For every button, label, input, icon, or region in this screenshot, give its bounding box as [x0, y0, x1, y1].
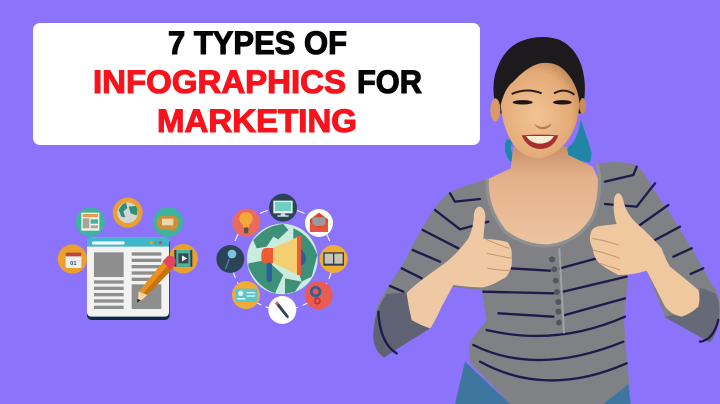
icon: monitor: [269, 194, 297, 222]
icon: envelope: [305, 209, 333, 237]
teal hair: [505, 120, 592, 163]
window: [87, 237, 170, 320]
icon: book: [320, 245, 348, 273]
icon: pencil: [137, 256, 176, 303]
button placket: [549, 248, 564, 333]
icon: light bulb: [232, 209, 260, 237]
left arm and hand: [407, 207, 512, 328]
title line 3: MARKETING: [157, 103, 357, 139]
jeans: [455, 362, 631, 404]
cuff: left sleeve: [373, 293, 430, 357]
title line 1: 7 TYPES OF: [168, 25, 347, 61]
smile: [522, 135, 558, 149]
eyebrows: [512, 90, 574, 95]
person giving thumbs up: [373, 37, 719, 404]
hair back: [493, 37, 585, 113]
icon: newspaper: [76, 207, 105, 237]
eyes: [513, 100, 572, 104]
shirt stripes: [378, 167, 718, 380]
icon: gears: [305, 281, 333, 309]
title line 2 end: FOR: [357, 64, 422, 100]
title panel: [33, 23, 480, 145]
neckband: [487, 163, 600, 246]
icon: calendar: [58, 244, 87, 274]
neck and chest: [487, 147, 602, 248]
right arm and hand: [590, 193, 699, 317]
face: [490, 63, 586, 158]
icon: globe: [113, 198, 143, 228]
megaphone: [261, 236, 306, 282]
cuff: right sleeve: [665, 287, 719, 343]
nose: [534, 123, 552, 129]
icon: magnifier: [216, 245, 244, 273]
icon: chat bubble: [153, 207, 183, 237]
icon: pen: [268, 296, 296, 324]
title line 2: INFOGRAPHICS: [93, 64, 346, 100]
icon: video: [169, 244, 198, 273]
icon: id card: [232, 281, 260, 309]
dashed ring: [232, 208, 333, 310]
shirt: [373, 162, 719, 404]
illustration: marketing megaphone wheel: [216, 194, 348, 324]
globe: [247, 224, 318, 294]
illustration: web page with icons: [58, 198, 198, 320]
icon: calendar: 01: [70, 261, 76, 267]
finger lines: [485, 238, 620, 271]
